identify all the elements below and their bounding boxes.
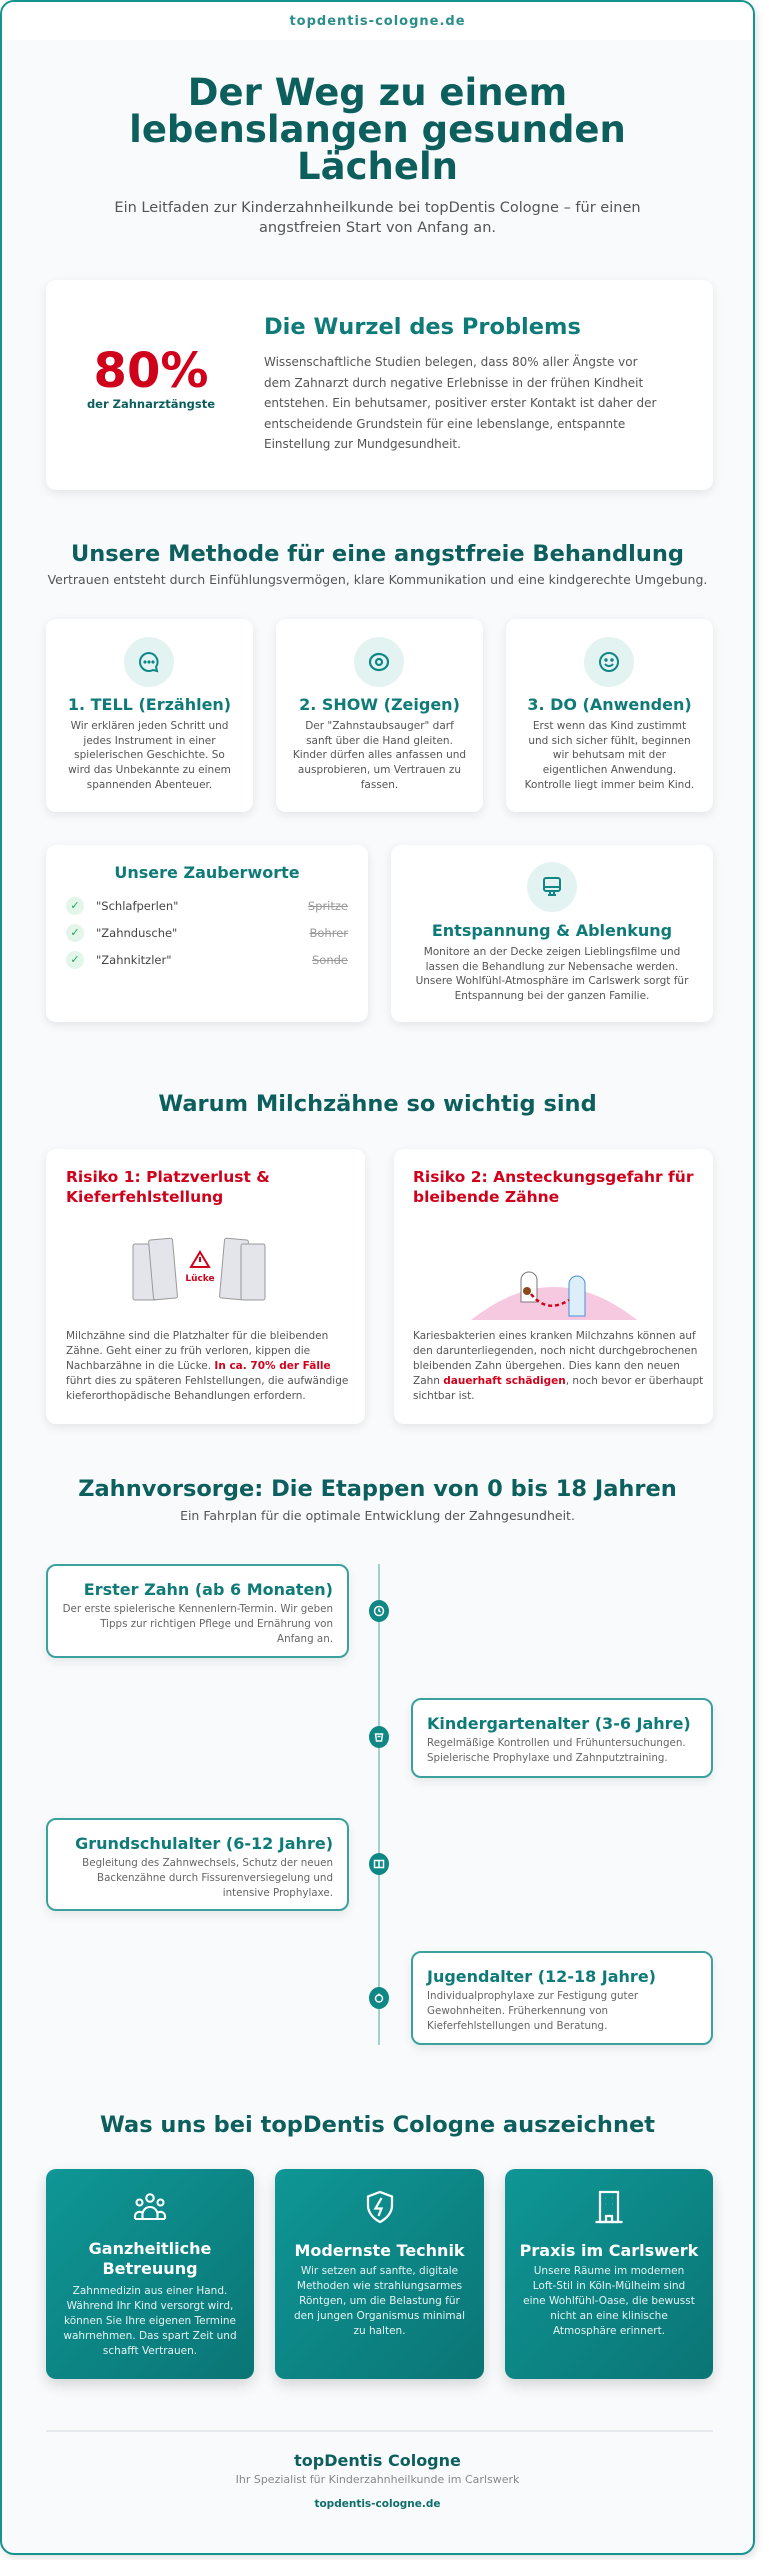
panel: SHOW (276, 619, 483, 812)
panel: risk 2: Risiko 2: Ansteckungsgefahr für (413, 1168, 693, 1186)
icon dot 4 (369, 1987, 389, 2009)
list: words (66, 897, 348, 969)
heading: milk teeth: Warum Milchzähne so wichtig sind (158, 1091, 597, 1117)
method subtitle: Vertrauen entsteht durch Einfühlungsvermögen, klare Kommunikation und eine kindgerechte Umgebung. (48, 572, 707, 587)
list: words: "Zahnkitzler" (96, 952, 171, 966)
heading: Die Wurzel des Problems: Die Wurzel des Problems (264, 314, 581, 340)
illustration: gap: Lücke (185, 1274, 215, 1284)
list: words: Spritze (308, 898, 348, 912)
footer: topdentis-cologne.de (314, 2498, 441, 2510)
feature card 1 (46, 2169, 254, 2379)
stage 4: Individualprophylaxe zur Festigung guter Gewohnheiten. Früherkennung von Kieferfehlstellungen und Beratung. (427, 1990, 638, 2032)
subtitle: Ein Leitfaden zur Kinderzahnheilkunde bei topDentis Cologne – für einen (114, 200, 641, 216)
illustration: infection (471, 1272, 637, 1320)
feature card 2 (275, 2169, 484, 2379)
subtitle (114, 200, 641, 236)
list: words: "Schlafperlen" (96, 898, 178, 912)
panel: risk 1: Milchzähne sind die Platzhalter für die bleibenden Zähne. Geht einer zu früh verloren, kippen die Nachbarzähne in die Lücke. In ca. 70% der Fälle führt dies zu späteren Fehlstellungen, die aufwändige kieferorthopädische Behandlungen erfordern. (66, 1330, 348, 1402)
timeline (46, 1564, 714, 2050)
stage 3 (46, 1818, 349, 1911)
icon dot 3 (369, 1853, 389, 1875)
panel: risk 1: Kieferfehlstellung (66, 1188, 223, 1206)
panel: TELL: 1. TELL (Erzählen) (68, 695, 231, 714)
feature card 3 (505, 2169, 713, 2379)
heading: method: Unsere Methode für eine angstfreie Behandlung (71, 541, 684, 567)
panel: magic words: Unsere Zauberworte (114, 863, 300, 882)
stage 2 (411, 1698, 713, 1778)
panel: relaxation (391, 845, 713, 1022)
icon: smile (584, 637, 634, 687)
panel: DO (506, 619, 713, 812)
icon dot 1 (369, 1600, 389, 1622)
panel: problem root (46, 280, 713, 490)
panel: risk 1: Risiko 1: Platzverlust & (66, 1168, 270, 1186)
feature card 3: Praxis im Carlswerk (520, 2241, 698, 2260)
icon: building (596, 2190, 622, 2224)
panel: TELL: Wir erklären jeden Schritt und jedes Instrument in einer spielerischen Geschichte. So wird das Unbekannte zu einem spannenden Abenteuer. (68, 720, 231, 791)
footer (236, 2451, 520, 2510)
stage 2: Kindergartenalter (3-6 Jahre) (427, 1714, 691, 1733)
list: words: "Zahndusche" (96, 926, 177, 940)
panel: magic words (46, 845, 368, 1022)
icon: monitor (527, 862, 577, 912)
feature card 2: Modernste Technik (294, 2241, 465, 2260)
icon: shield (366, 2190, 394, 2224)
panel: risk 2: Kariesbakterien eines kranken Milchzahns können auf den darunterliegenden, noch nicht durchgebrochenen bleibenden Zahn übergehen. Dies kann den neuen Zahn dauerhaft schädigen, noch bevor er überhaupt sichtbar ist. (413, 1330, 703, 1402)
panel: relaxation: Monitore an der Decke zeigen Lieblingsfilme und lassen die Behandlung zur Nebensache werden. Unsere Wohlfühl-Atmosphäre im Carlswerk sorgt für Entspannung bei der ganzen Familie. (416, 946, 688, 1002)
subtitle: angstfreien Start von Anfang an. (259, 220, 496, 236)
stage 1: Erster Zahn (ab 6 Monaten) (84, 1580, 333, 1599)
illustration: gap (132, 1238, 266, 1300)
title: Lächeln (297, 145, 458, 188)
timeline subtitle: Ein Fahrplan für die optimale Entwicklung der Zahngesundheit. (180, 1508, 575, 1523)
title (129, 71, 626, 188)
title: Der Weg zu einem (188, 71, 567, 114)
stat 80%: 80% (94, 343, 208, 399)
footer: Ihr Spezialist für Kinderzahnheilkunde im Carlswerk (236, 2473, 519, 2486)
feature card 2: Wir setzen auf sanfte, digitale Methoden wie strahlungsarmes Röntgen, um die Belastung für den jungen Organismus minimal zu halten. (294, 2265, 465, 2337)
panel: risk 2: bleibende Zähne (413, 1188, 559, 1206)
text block: Wissenschaftliche Studien belegen, dass 80% aller Ängste vor dem Zahnarzt durch negative Erlebnisse in der frühen Kindheit entstehen. Ein behutsamer, positiver erster Kontakt ist daher der entscheidende Grundstein für eine lebenslange, entspannte Einstellung zur Mundgesundheit. (264, 355, 656, 451)
panel: risk 2 (394, 1149, 713, 1424)
panel: DO: 3. DO (Anwenden) (527, 695, 692, 714)
header bar (2, 2, 753, 40)
stage 3: Grundschulalter (6-12 Jahre) (75, 1834, 333, 1853)
stage 4: Jugendalter (12-18 Jahre) (427, 1967, 656, 1986)
panel: DO: Erst wenn das Kind zustimmt und sich sicher fühlt, beginnen wir behutsam mit der eigentlichen Anwendung. Kontrolle liegt immer beim Kind. (525, 720, 694, 791)
icon: eye (354, 637, 404, 687)
title: lebenslangen gesunden (129, 108, 626, 151)
footer: topDentis Cologne (294, 2451, 461, 2470)
list: words: Bohrer (310, 926, 348, 940)
feature card 1: Zahnmedizin aus einer Hand. Während Ihr Kind versorgt wird, können Sie Ihre eigenen Termine wahrnehmen. Das spart Zeit und schafft Vertrauen. (63, 2285, 237, 2357)
feature card 3: Unsere Räume im modernen Loft-Stil in Köln-Mülheim sind eine Wohlfühl-Oase, die bewusst nicht an eine klinische Atmosphäre erinnert. (523, 2265, 695, 2337)
panel: risk 1 (46, 1149, 365, 1424)
icon dot 2 (369, 1726, 389, 1748)
heading: features: Was uns bei topDentis Cologne auszeichnet (100, 2112, 655, 2138)
heading: timeline: Zahnvorsorge: Die Etappen von 0 bis 18 Jahren (78, 1476, 677, 1502)
stage 4 (411, 1951, 713, 2045)
stage 1: Der erste spielerische Kennenlern-Termin. Wir geben Tipps zur richtigen Pflege und Ernährung von Anfang an. (63, 1603, 333, 1645)
icon: people (134, 2193, 166, 2220)
header bar: topdentis-cologne.de (289, 14, 466, 29)
icon: chat (124, 637, 174, 687)
stage 1 (46, 1564, 349, 1658)
feature card 1: Betreuung (102, 2259, 198, 2278)
list: words: Sonde (312, 952, 348, 966)
feature card 1: Ganzheitliche (89, 2239, 211, 2258)
list: words: ✓ (70, 898, 80, 912)
stage 2: Regelmäßige Kontrollen und Frühuntersuchungen. Spielerische Prophylaxe und Zahnputztraining. (427, 1737, 686, 1764)
panel: relaxation: Entspannung & Ablenkung (432, 921, 672, 940)
panel: TELL (46, 619, 253, 812)
panel: SHOW: 2. SHOW (Zeigen) (299, 695, 460, 714)
stage 3: Begleitung des Zahnwechsels, Schutz der neuen Backenzähne durch Fissurenversiegelung und intensive Prophylaxe. (82, 1857, 333, 1899)
list: words: ✓ (70, 926, 80, 938)
stat 80%: der Zahnarztängste (87, 397, 215, 411)
panel: SHOW: Der "Zahnstaubsauger" darf sanft über die Hand gleiten. Kinder dürfen alles anfassen und ausprobieren, um Vertrauen zu fassen. (293, 720, 466, 791)
list: words: ✓ (70, 952, 80, 966)
